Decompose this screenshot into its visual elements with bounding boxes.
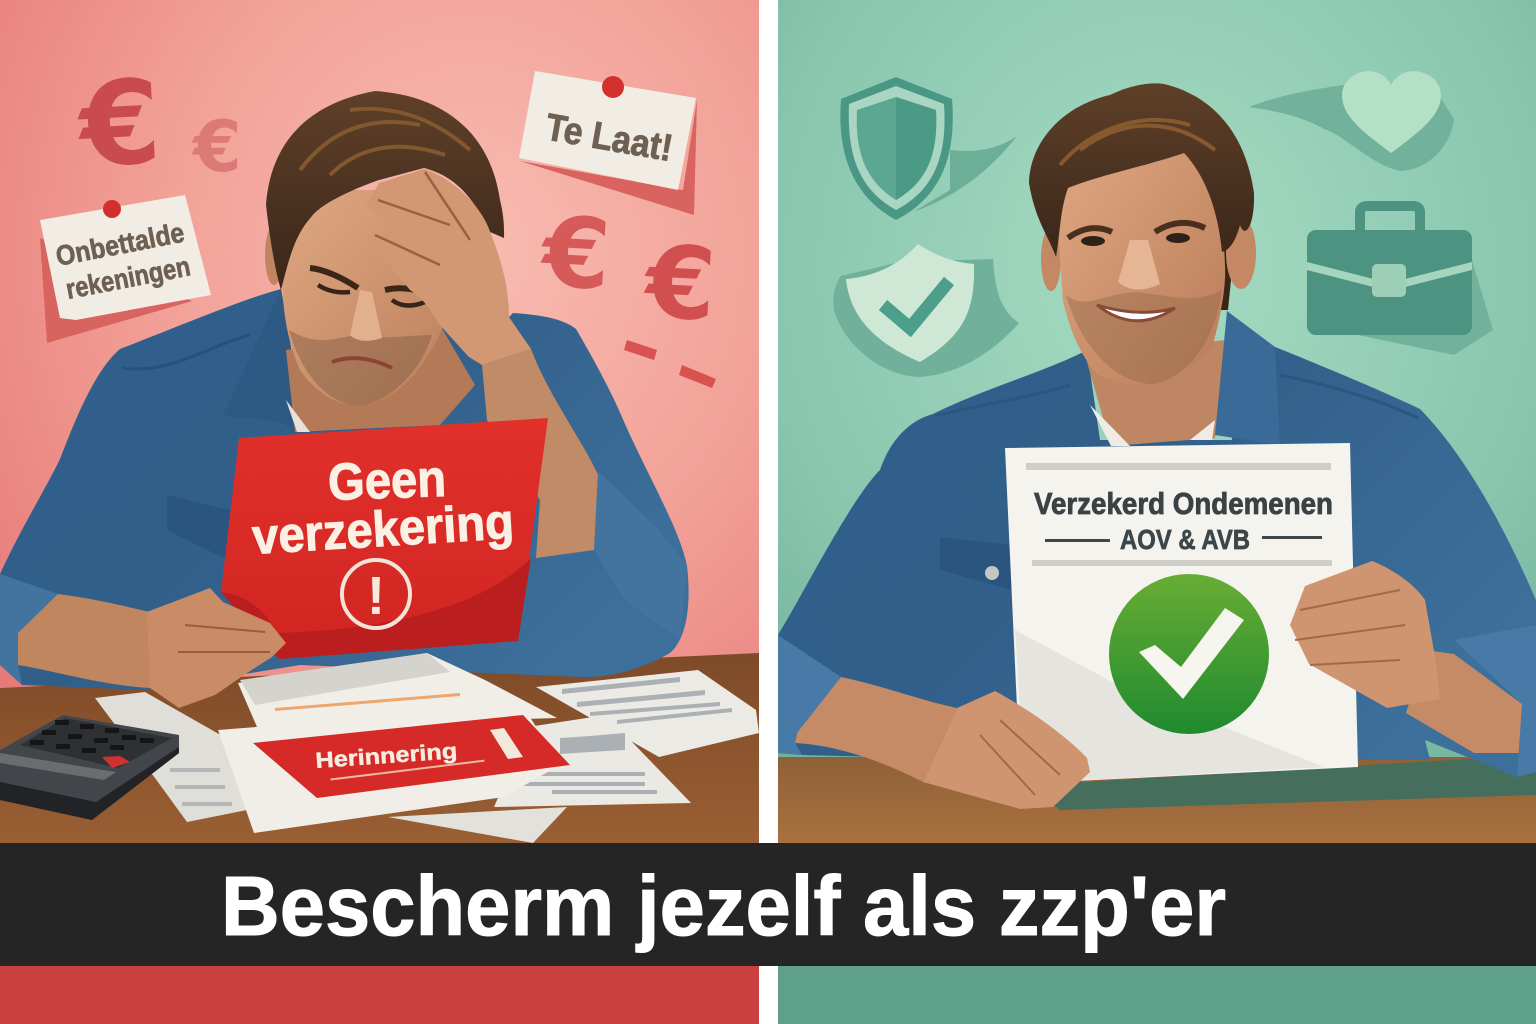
desk	[778, 757, 1536, 843]
pocket	[940, 537, 1012, 590]
right sleeve cuff	[1454, 625, 1536, 777]
document: Verzekerd Ondemenen	[1005, 443, 1358, 783]
hair	[1029, 83, 1254, 257]
card: Geen verzekering	[221, 418, 548, 659]
pocket button	[985, 566, 999, 580]
icon: heart	[1249, 71, 1454, 171]
brows and eyes	[310, 268, 430, 294]
collar	[1215, 311, 1280, 445]
smile	[1097, 305, 1175, 321]
neck	[286, 325, 475, 432]
icon: large euro sign: €	[73, 55, 164, 194]
card: Geen verzekering: verzekering	[250, 493, 515, 565]
card: Geen verzekering: Geen	[327, 450, 447, 512]
nose	[1118, 240, 1160, 290]
hair highlights	[1060, 120, 1215, 165]
panel: left uninsured scene	[0, 0, 759, 843]
icon: euro sign far right: €	[641, 223, 719, 344]
note: Te Laat	[519, 71, 697, 215]
hands holding document	[923, 561, 1440, 809]
shirt	[778, 311, 1536, 777]
papers on desk: Herinnering	[315, 738, 458, 773]
yoke stitching	[935, 375, 1418, 418]
hand holding card	[147, 588, 286, 708]
note: Te Laat: Te Laat!	[542, 107, 676, 170]
title banner	[0, 843, 1536, 966]
face	[282, 190, 480, 406]
forearm raised	[482, 349, 605, 558]
icon: check shield	[833, 244, 1019, 377]
ear	[265, 225, 283, 285]
back hair	[1218, 240, 1235, 310]
document: Verzekerd Ondemenen: Verzekerd Ondemenen	[1034, 486, 1333, 521]
brows and eyes	[1068, 223, 1205, 238]
icon: briefcase	[1307, 206, 1493, 355]
desk	[0, 653, 759, 843]
ears	[1041, 227, 1061, 291]
yoke stitching and pocket	[122, 335, 250, 369]
panel: right insured scene	[778, 0, 1536, 843]
stubble	[289, 330, 432, 406]
icon: green check circle	[1109, 574, 1269, 734]
bottom strip right	[778, 966, 1536, 1024]
left sleeve cuff	[778, 635, 841, 755]
icon: small euro sign: €	[191, 106, 242, 188]
note: Onbetaalde rekeningen	[40, 195, 211, 343]
neck	[1085, 340, 1225, 446]
forearm left	[18, 594, 150, 688]
papers on desk	[95, 653, 759, 843]
hair highlights	[300, 109, 470, 175]
shirt	[0, 289, 689, 690]
hand on head	[366, 169, 531, 365]
face	[1057, 140, 1225, 385]
desk shadow	[1030, 755, 1536, 810]
card: Geen verzekering: !	[367, 566, 385, 626]
undershirt	[286, 400, 310, 432]
bottom strip left	[0, 966, 759, 1024]
icon: minus signs	[624, 340, 716, 388]
note: Onbetaalde rekeningen: Onbettalde	[53, 217, 187, 272]
figure: stressed man	[0, 91, 689, 690]
collar	[223, 289, 300, 432]
right forearm	[1406, 650, 1522, 753]
document: Verzekerd Ondemenen: AOV & AVB	[1120, 524, 1250, 555]
mouth	[332, 358, 392, 368]
t-shirt	[1090, 405, 1215, 446]
title banner: Bescherm jezelf als zzp'er	[221, 859, 1226, 953]
finger lines	[375, 172, 470, 265]
stubble	[1066, 290, 1222, 384]
figure: smiling man	[778, 83, 1536, 782]
left forearm	[795, 677, 957, 782]
icon: calculator	[0, 715, 179, 820]
icon: large shield	[840, 77, 1017, 220]
icon: euro sign right: €	[538, 195, 613, 312]
rolled sleeve right	[594, 471, 687, 640]
hair	[266, 91, 504, 290]
note: Onbetaalde rekeningen: rekeningen	[63, 250, 193, 305]
rolled sleeve left	[0, 574, 58, 685]
nose	[350, 290, 382, 341]
